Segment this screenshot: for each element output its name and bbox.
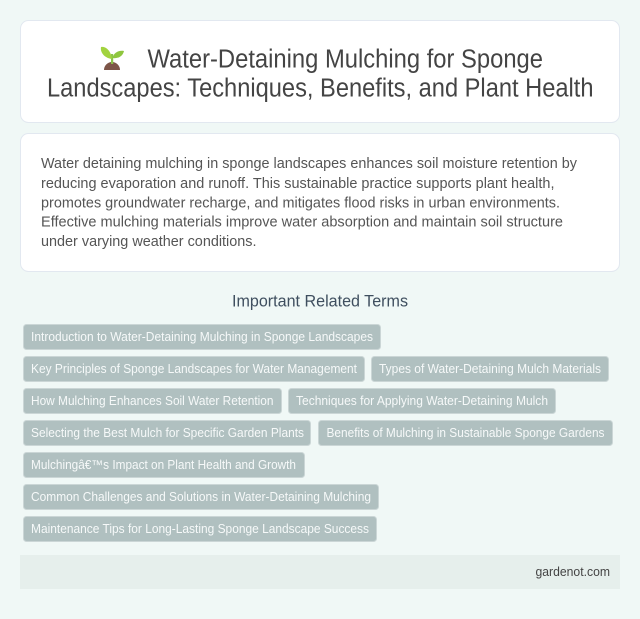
heading: important related terms: Important Related Terms: [232, 292, 408, 310]
footer bar: [20, 555, 620, 589]
text: summary paragraph: under varying weather conditions.: [41, 234, 256, 250]
tag: selecting mulch: Selecting the Best Mulch for Specific Garden Plants: [31, 426, 304, 440]
tag: soil water retention: [24, 388, 282, 414]
tag: plant health impact: Mulchingâ€™s Impact on Plant Health and Growth: [31, 458, 296, 472]
panel: summary card: [20, 134, 620, 272]
tag: types of mulch: Types of Water-Detaining Mulch Materials: [379, 362, 601, 376]
panel: title card: [20, 20, 620, 122]
icon: seedling: [101, 47, 124, 70]
tag: types of mulch: [372, 356, 608, 382]
tag: key principles: [24, 356, 364, 382]
text: summary paragraph: [41, 156, 578, 250]
tag: common challenges: Common Challenges and Solutions in Water-Detaining Mulching: [31, 490, 371, 504]
tag: common challenges: [24, 484, 378, 510]
tag: benefits: [318, 420, 612, 446]
tag: benefits: Benefits of Mulching in Sustainable Sponge Gardens: [326, 426, 604, 440]
text: summary paragraph: Water detaining mulching in sponge landscapes enhances soil moisture retention by: [41, 156, 578, 172]
tag: introduction: Introduction to Water-Detaining Mulching in Sponge Landscapes: [31, 330, 373, 344]
tag: soil water retention: How Mulching Enhances Soil Water Retention: [31, 394, 274, 408]
tag: techniques: Techniques for Applying Water-Detaining Mulch: [296, 394, 548, 408]
tag list: related terms: [24, 324, 612, 542]
tag: selecting mulch: [24, 420, 310, 446]
text: summary paragraph: Effective mulching materials improve water absorption and maintain soil structure: [41, 214, 563, 230]
heading: title: [47, 46, 594, 102]
text: summary paragraph: promotes groundwater recharge, and mitigates flood risks in urban environments.: [41, 196, 560, 212]
tag: plant health impact: [24, 452, 304, 478]
tag: techniques: [288, 388, 556, 414]
heading: title: Landscapes: Techniques, Benefits, and Plant Health: [47, 74, 594, 102]
tag: maintenance tips: [24, 516, 376, 542]
tag: key principles: Key Principles of Sponge Landscapes for Water Management: [31, 362, 357, 376]
footer: site name: gardenot.com: [536, 565, 610, 579]
tag: introduction: [24, 324, 380, 350]
text: summary paragraph: reducing evaporation and runoff. This sustainable practice supports plant health,: [41, 176, 554, 192]
heading: title: Water-Detaining Mulching for Sponge: [148, 46, 543, 74]
tag: maintenance tips: Maintenance Tips for Long-Lasting Sponge Landscape Success: [31, 522, 369, 536]
